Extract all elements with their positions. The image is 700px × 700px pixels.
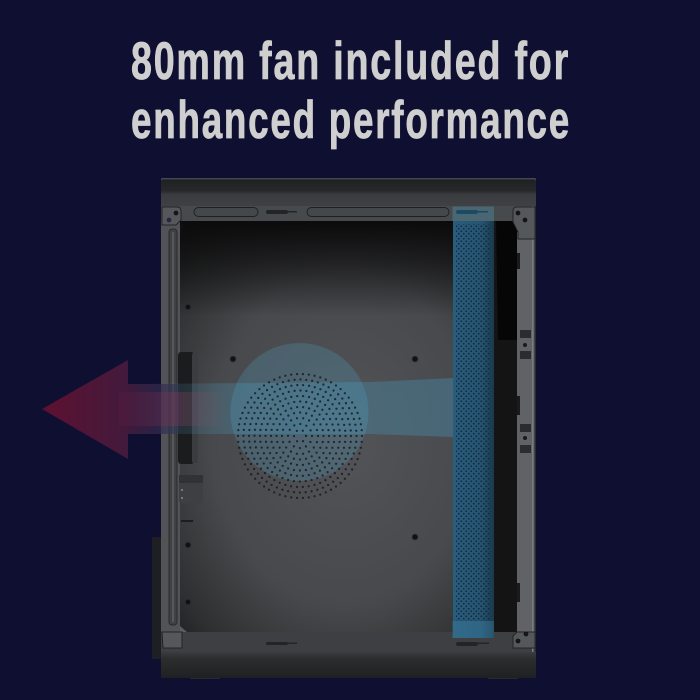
right clips <box>517 253 531 602</box>
top band <box>161 178 536 206</box>
cable slots <box>266 210 489 646</box>
standoffs <box>185 304 418 605</box>
title <box>131 32 571 150</box>
inner panel <box>180 221 524 632</box>
right frame <box>517 232 532 632</box>
blue intake circle <box>230 343 368 481</box>
case feet <box>190 677 518 679</box>
red air core <box>118 392 228 426</box>
blue airflow beam <box>128 378 453 437</box>
rear bracket <box>152 537 162 659</box>
red exhaust arrow <box>42 360 180 459</box>
side mesh strip <box>452 206 494 638</box>
PC case <box>152 178 536 679</box>
corner brackets <box>162 207 535 648</box>
fan <box>178 352 203 522</box>
top frame rail <box>161 206 536 221</box>
bottom frame rail <box>161 632 536 652</box>
right dark cavity <box>494 221 517 632</box>
top rail slots <box>194 208 449 216</box>
corner screws <box>167 211 528 643</box>
bottom band <box>161 652 536 678</box>
fan vent perforation <box>238 374 362 498</box>
left frame channel <box>161 221 180 632</box>
case frame <box>161 178 536 678</box>
